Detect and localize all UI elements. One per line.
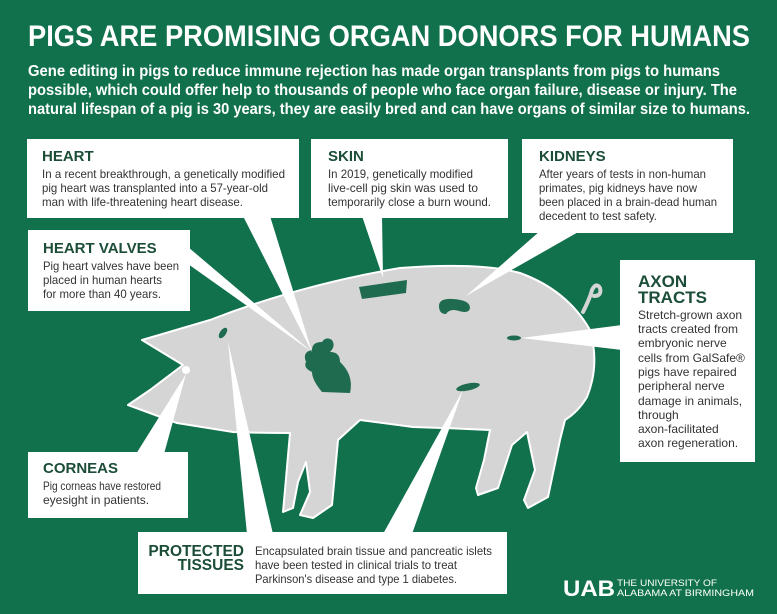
panel: skin: temporarily close a burn wound.: [328, 195, 491, 209]
panel: kidneys: After years of tests in non-human: [539, 167, 706, 181]
panel: axon tracts: Stretch-grown axon: [638, 308, 742, 322]
panel: kidneys: [522, 139, 733, 233]
panel: axon tracts: [620, 260, 755, 462]
panel: corneas: Pig corneas have restored: [43, 479, 161, 493]
intro text: [28, 63, 750, 118]
panel: axon tracts: through: [638, 408, 679, 422]
panel: axon tracts: cells from GalSafe®: [638, 351, 745, 365]
panel: axon tracts: axon regeneration.: [638, 436, 738, 450]
intro text: natural lifespan of a pig is 30 years, they are easily bred and can have organs of similar size to humans.: [28, 101, 750, 118]
panel: heart valves: HEART VALVES: [43, 240, 157, 257]
panel: axon tracts: tracts created from: [638, 322, 738, 336]
logo: UAB: [563, 576, 754, 601]
intro text: possible, which could offer help to thousands of people who face organ failure, disease or injury. The: [28, 82, 737, 99]
logo: UAB: UAB: [563, 576, 615, 601]
icon: pig tail: [583, 285, 600, 312]
panel: kidneys: decedent to test safety.: [539, 209, 657, 223]
panel: heart: HEART: [42, 148, 94, 165]
panel: protected tissues: Parkinson's disease and type 1 diabetes.: [255, 572, 457, 586]
panel: skin: SKIN: [328, 148, 364, 165]
organ: protected tissue: [456, 381, 480, 393]
panel: corneas: CORNEAS: [43, 460, 118, 477]
panel: axon tracts: damage in animals,: [638, 394, 742, 408]
panel: kidneys: KIDNEYS: [539, 148, 606, 165]
intro text: Gene editing in pigs to reduce immune rejection has made organ transplants from pigs to humans: [28, 63, 720, 80]
panel: kidneys: been placed in a brain-dead human: [539, 195, 717, 209]
panel: heart valves: Pig heart valves have been: [43, 259, 179, 273]
panel: heart: In a recent breakthrough, a genetically modified: [42, 167, 285, 181]
panel: protected tissues: [138, 532, 507, 594]
panel: protected tissues: TISSUES: [178, 557, 244, 574]
icon: eye: [182, 366, 190, 374]
panel: axon tracts: embryonic nerve: [638, 336, 727, 350]
panel: heart valves: placed in human hearts: [43, 273, 162, 287]
callout pointers: [136, 216, 622, 534]
panel: axon tracts: peripheral nerve: [638, 379, 725, 393]
panel: axon tracts: AXON: [638, 272, 687, 291]
panel: corneas: eyesight in patients.: [43, 493, 149, 507]
pig silhouette: [128, 266, 594, 518]
organ: heart: [305, 338, 351, 393]
organ: axon tract: [507, 336, 521, 340]
logo: UAB: THE UNIVERSITY OF: [617, 578, 717, 589]
panel: axon tracts: pigs have repaired: [638, 365, 737, 379]
panel: corneas: [28, 452, 188, 518]
panel: axon tracts: TRACTS: [638, 288, 707, 307]
panel: heart: [27, 139, 299, 218]
panel: protected tissues: have been tested in clinical trials to treat: [255, 558, 458, 572]
panel: protected tissues: Encapsulated brain tissue and pancreatic islets: [255, 544, 492, 558]
panel: protected tissues: PROTECTED: [148, 543, 244, 560]
organ: skin patch: [359, 280, 407, 299]
panel: axon tracts: axon-facilitated: [638, 422, 719, 436]
panel: heart: pig heart was transplanted into a 57-year-old: [42, 181, 268, 195]
organ: heart valve: [217, 326, 229, 340]
panel: kidneys: primates, pig kidneys have now: [539, 181, 697, 195]
panel: heart: man with life-threatening heart disease.: [42, 195, 243, 209]
panel: heart valves: for more than 40 years.: [43, 287, 161, 301]
panel: skin: In 2019, genetically modified: [328, 167, 473, 181]
panel: skin: [311, 139, 508, 218]
panel: skin: live-cell pig skin was used to: [328, 181, 478, 195]
organ: kidney: [439, 299, 470, 314]
logo: UAB: ALABAMA AT BIRMINGHAM: [617, 588, 754, 599]
panel: heart valves: [28, 230, 190, 311]
